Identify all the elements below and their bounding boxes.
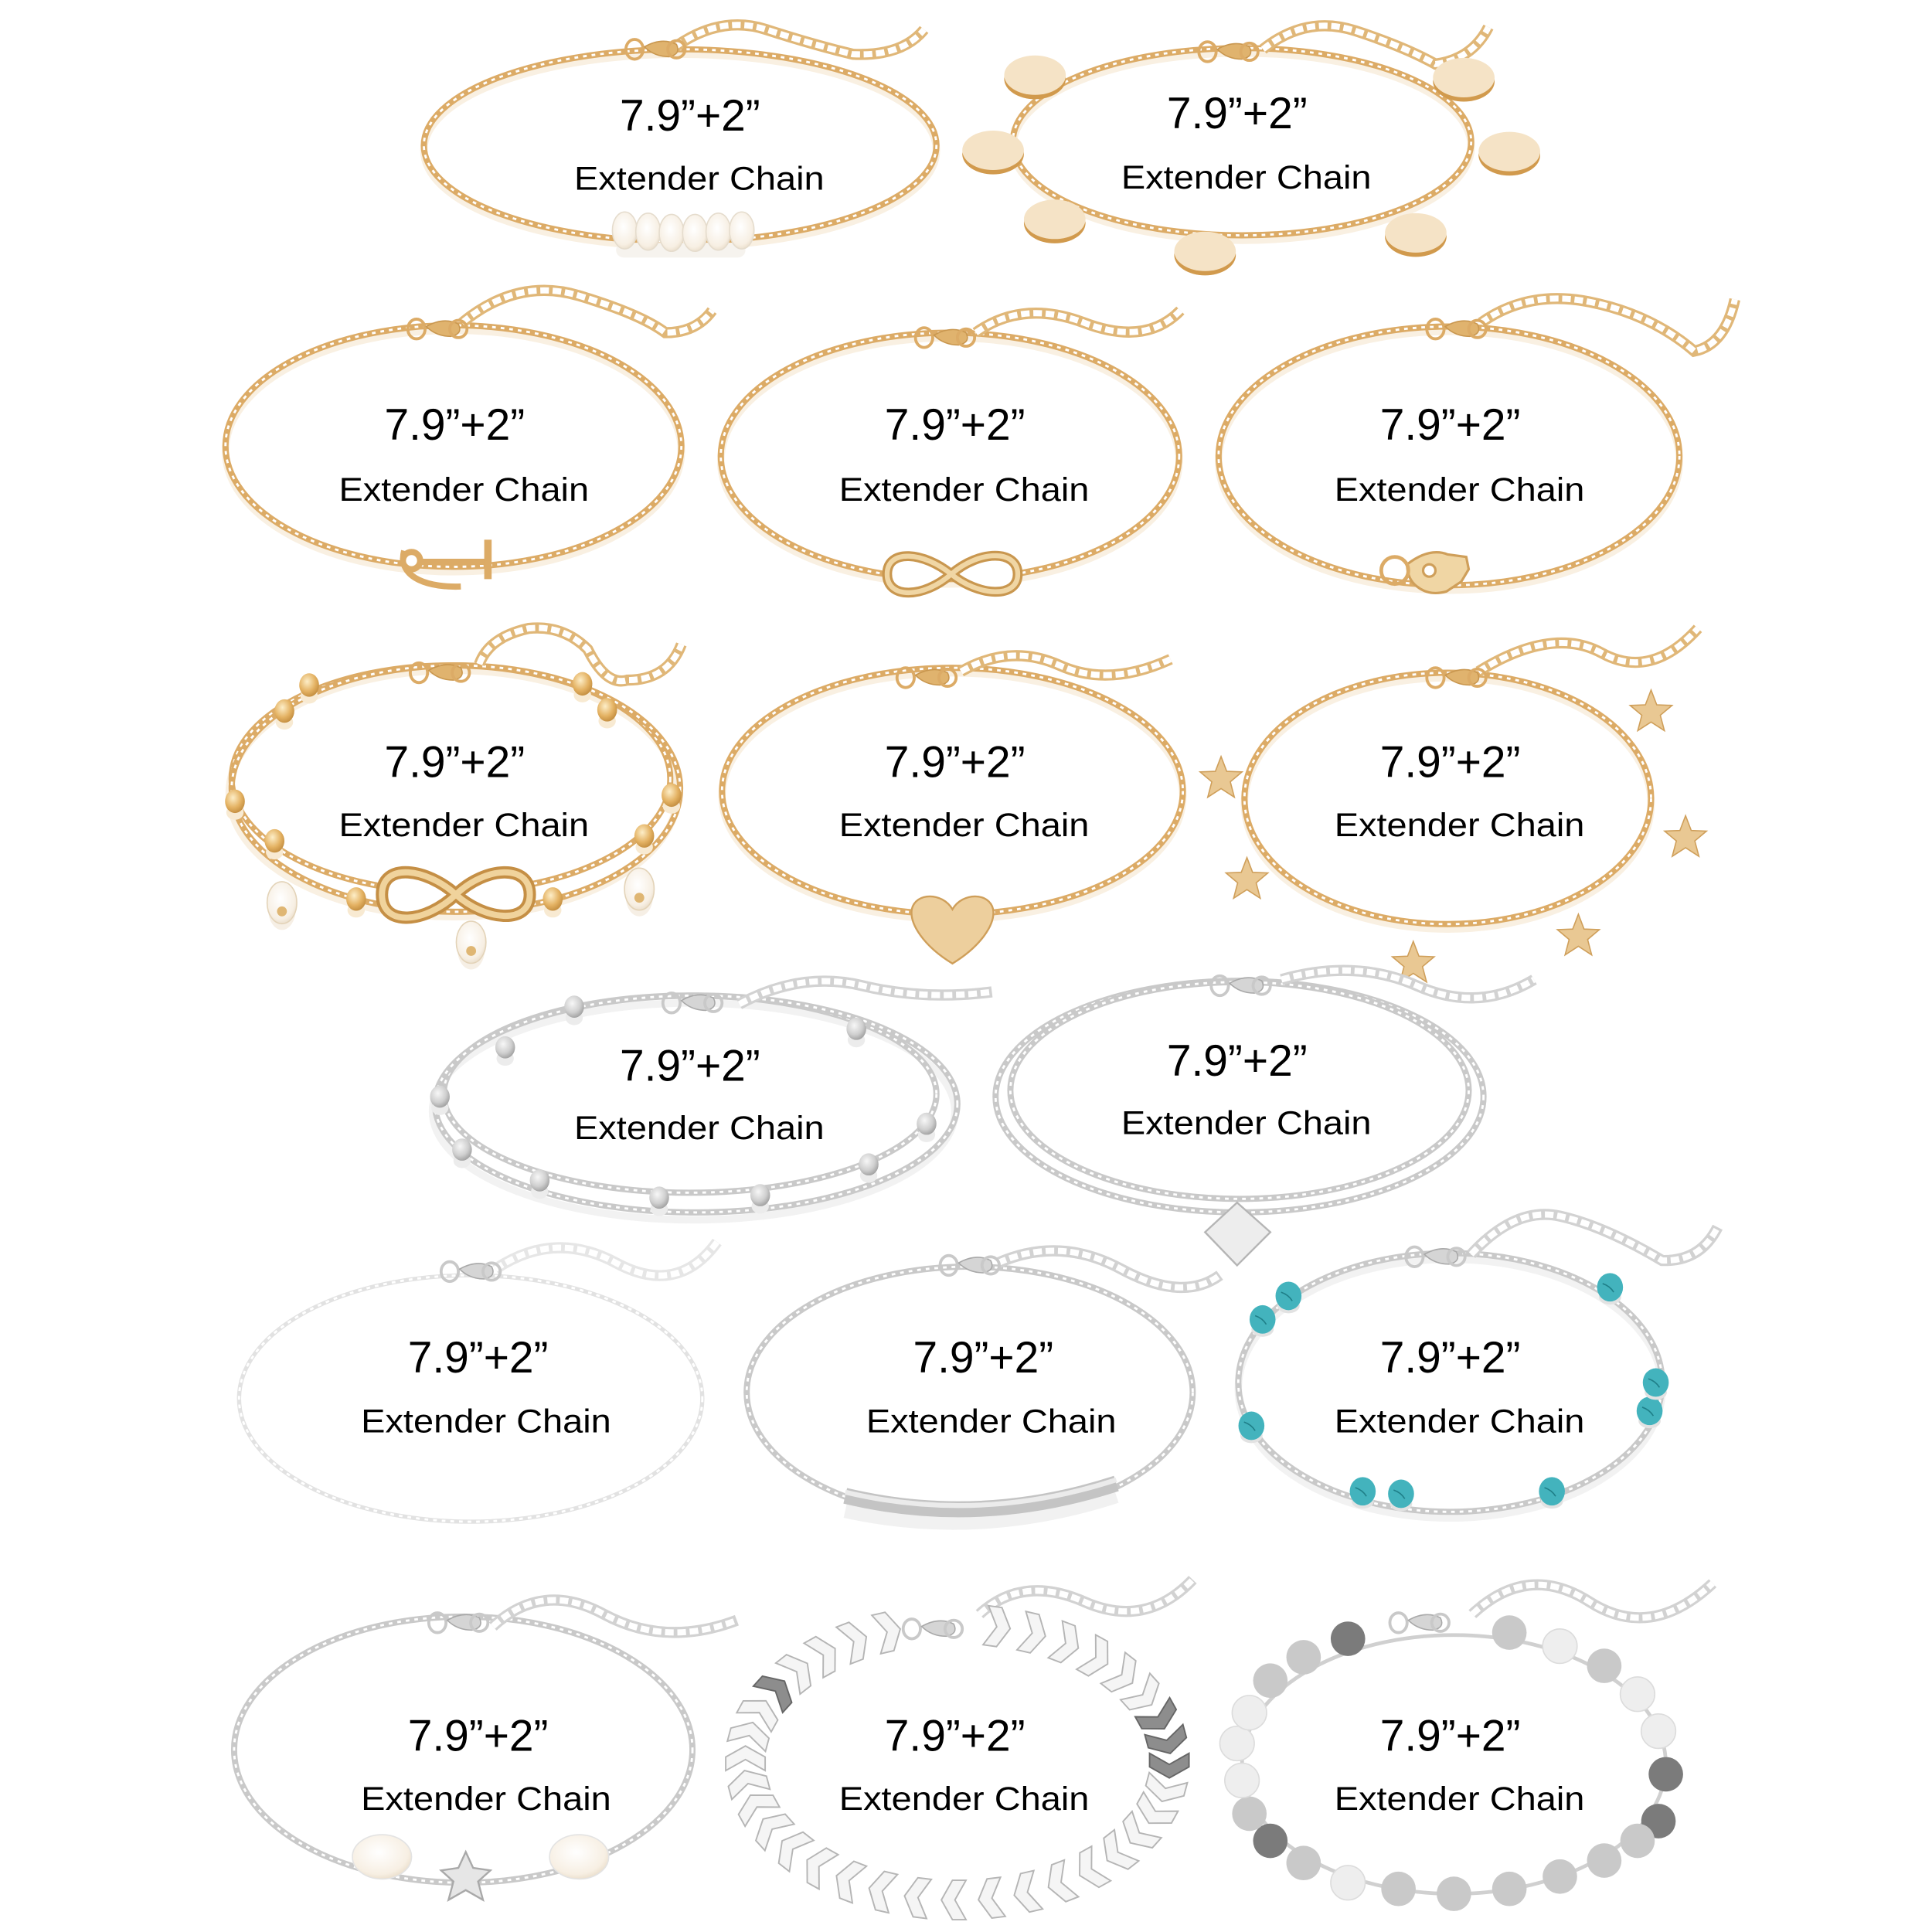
extender label: Extender Chain xyxy=(361,1781,611,1818)
infinity charm xyxy=(382,872,530,917)
size label: 7.9”+2” xyxy=(620,1041,760,1090)
silver beads xyxy=(430,995,937,1216)
chevron links xyxy=(726,1606,1189,1920)
diamond charm xyxy=(1205,1202,1270,1265)
extender label: Extender Chain xyxy=(839,1781,1089,1818)
extender label: Extender Chain xyxy=(1335,1781,1584,1818)
bracelet: silver triple strand diamond xyxy=(995,971,1534,1265)
size label: 7.9”+2” xyxy=(913,1333,1053,1383)
extender label: Extender Chain xyxy=(574,1110,825,1147)
extender label: Extender Chain xyxy=(1335,471,1584,509)
size label: 7.9”+2” xyxy=(384,737,525,787)
gold beads xyxy=(225,672,682,917)
size label: 7.9”+2” xyxy=(1380,1333,1520,1383)
size label: 7.9”+2” xyxy=(1167,89,1308,138)
bracelet: silver turquoise beads xyxy=(1238,1214,1718,1518)
extender label: Extender Chain xyxy=(1335,1403,1584,1440)
bracelet: gold discs xyxy=(962,26,1540,275)
bracelet: gold pearl bar xyxy=(423,25,937,257)
extender label: Extender Chain xyxy=(1335,807,1584,844)
turquoise beads xyxy=(1239,1273,1668,1511)
extender label: Extender Chain xyxy=(338,471,589,509)
extender label: Extender Chain xyxy=(574,161,825,198)
bracelet: silver chevron xyxy=(726,1580,1192,1920)
bracelet: silver beads double strand xyxy=(430,981,992,1219)
bracelet: thin silver chain xyxy=(239,1242,717,1522)
gold disc charms xyxy=(962,56,1540,275)
star charms xyxy=(1200,690,1706,982)
extender label: Extender Chain xyxy=(866,1403,1117,1440)
extender label: Extender Chain xyxy=(1121,1105,1372,1142)
size label: 7.9”+2” xyxy=(384,400,525,450)
bracelet: gold anchor xyxy=(226,291,713,587)
curved bar charm xyxy=(845,1480,1117,1522)
size label: 7.9”+2” xyxy=(885,737,1026,787)
infinity charm xyxy=(887,556,1018,593)
hand charm xyxy=(1381,553,1469,593)
size label: 7.9”+2” xyxy=(408,1712,549,1761)
size label: 7.9”+2” xyxy=(620,91,760,141)
size label: 7.9”+2” xyxy=(885,1712,1026,1761)
bracelet: gold heart xyxy=(722,655,1183,964)
pearl drops xyxy=(267,868,654,969)
size label: 7.9”+2” xyxy=(1380,1712,1520,1761)
heart charm xyxy=(912,896,993,964)
bracelet: silver sequins xyxy=(1219,1583,1713,1911)
extender label: Extender Chain xyxy=(361,1403,611,1440)
bracelet: silver curved bar xyxy=(747,1250,1219,1522)
bracelet: gold double strand infinity with pearls xyxy=(225,628,682,969)
pearl beads xyxy=(352,1835,609,1879)
size label: 7.9”+2” xyxy=(885,400,1026,450)
size label: 7.9”+2” xyxy=(1380,400,1520,450)
size label: 7.9”+2” xyxy=(1167,1036,1308,1086)
extender label: Extender Chain xyxy=(338,807,589,844)
pearl bar xyxy=(612,212,754,257)
size label: 7.9”+2” xyxy=(408,1333,549,1383)
extender label: Extender Chain xyxy=(1121,159,1372,196)
sequin discs xyxy=(1219,1615,1683,1911)
extender label: Extender Chain xyxy=(839,807,1089,844)
size label: 7.9”+2” xyxy=(1380,737,1520,787)
anchor charm xyxy=(403,539,488,587)
extender label: Extender Chain xyxy=(839,471,1089,509)
bracelet: silver pearls and starfish xyxy=(234,1600,736,1900)
starfish charm xyxy=(441,1852,491,1900)
bracelet: gold hamsa xyxy=(1219,298,1735,593)
bracelet: gold stars xyxy=(1200,628,1706,982)
bracelet: gold infinity xyxy=(721,311,1180,593)
